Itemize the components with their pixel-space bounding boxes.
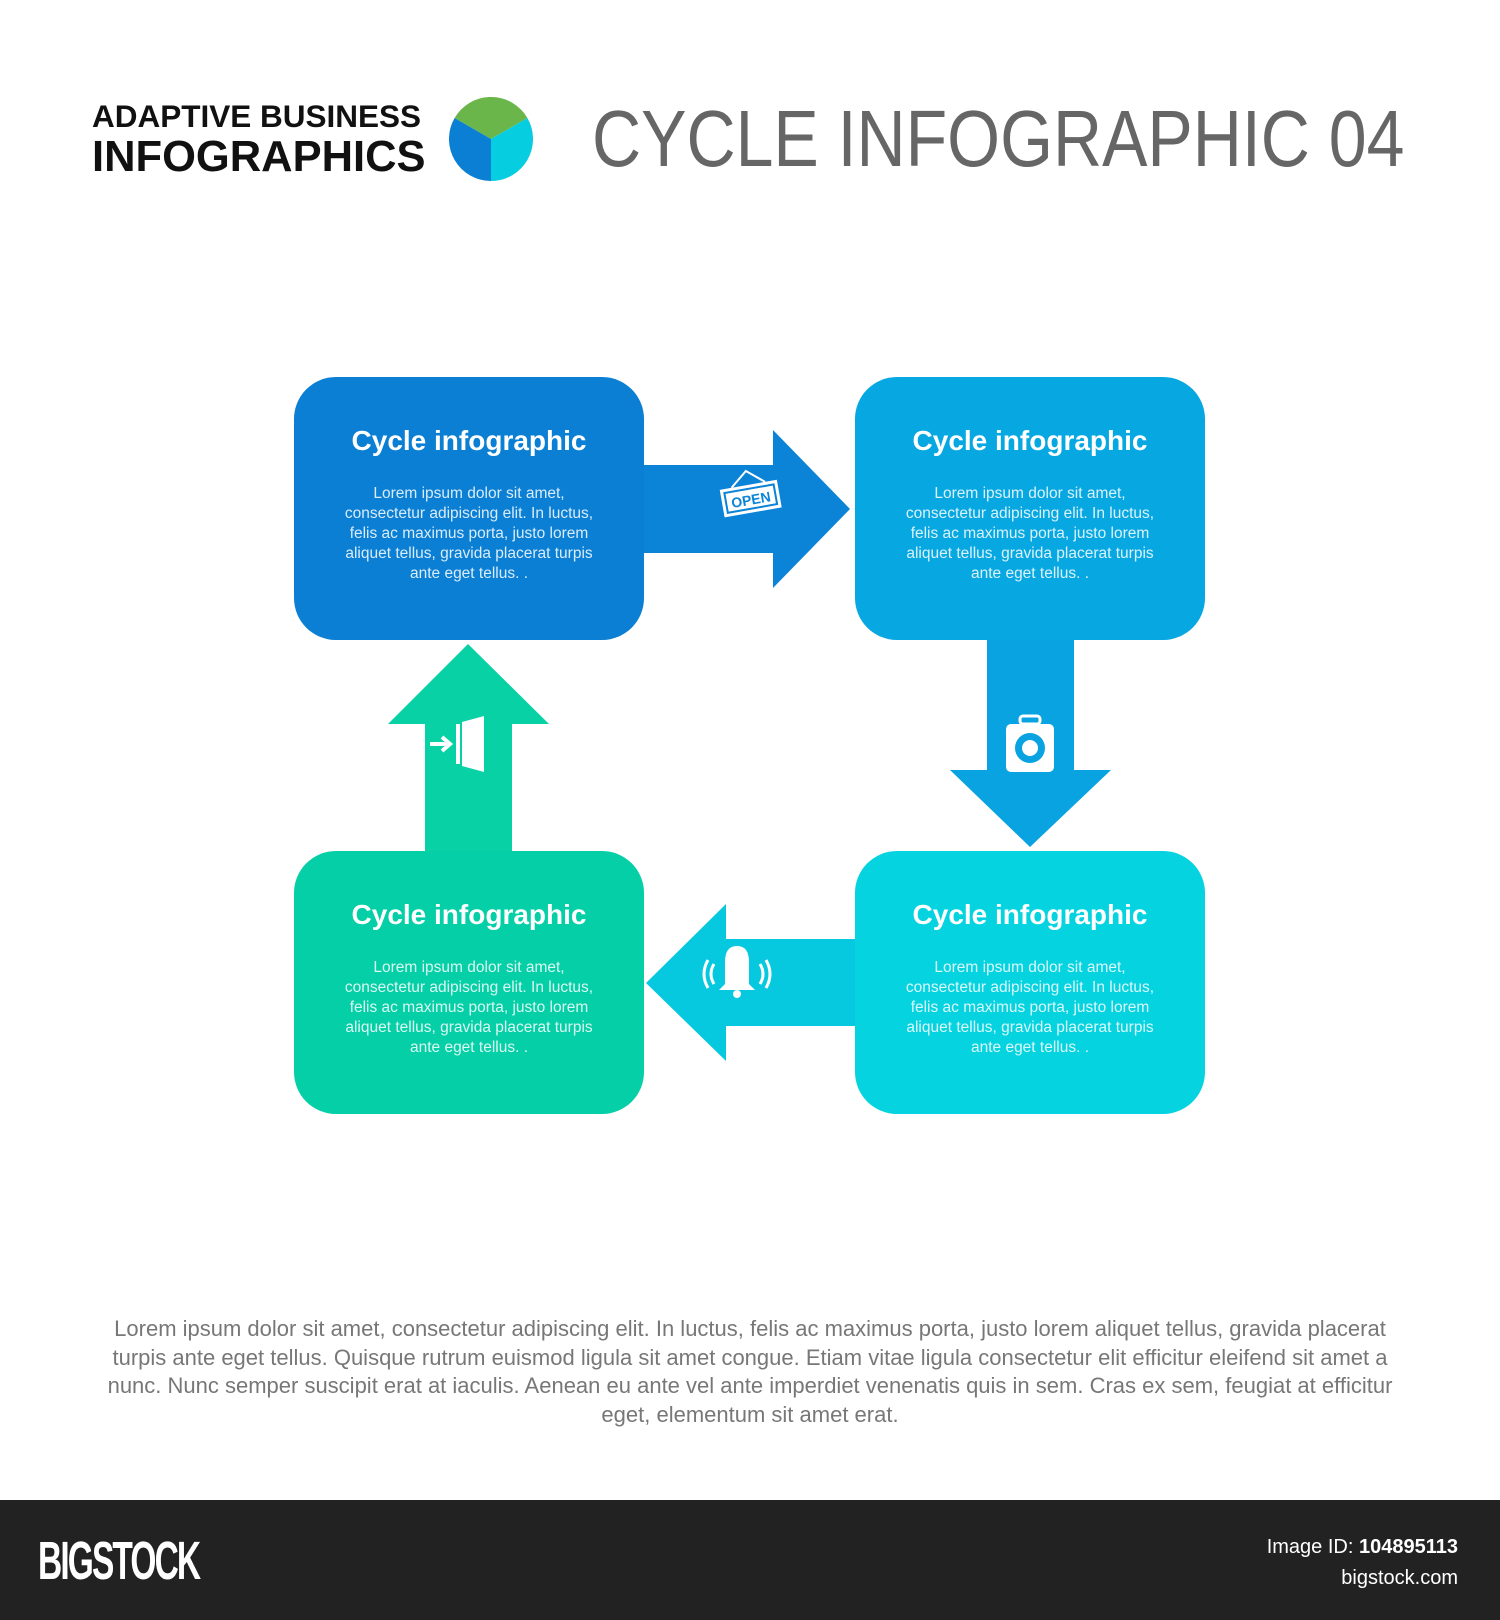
panel: bottom right: Cycle infographic (913, 899, 1147, 930)
bottom paragraph: Lorem ipsum dolor sit amet, consectetur adipiscing elit. In luctus, felis ac maximus porta, justo lorem aliquet tellus, gravida placerat turpis ante eget tellus. Quisque rutrum euismod ligula sit amet congue. Etiam vitae ligula consectetur elit efficitur eleifend sit amet a nunc. Nunc semper suscipit erat at iaculis. Aenean eu ante vel ante imperdiet venenatis quis in sem. Cras ex sem, feugiat at efficitur eget, elementum sit amet erat. (108, 1316, 1392, 1426)
panel: top right: Lorem ipsum dolor sit amet, consectetur adipiscing elit. In luctus, felis ac maximus porta, justo lorem aliquet tellus, gravida placerat turpis ante eget tellus. . (906, 485, 1154, 582)
header logo text: INFOGRAPHICS (92, 133, 426, 181)
panel: top left: Lorem ipsum dolor sit amet, consectetur adipiscing elit. In luctus, felis ac maximus porta, justo lorem aliquet tellus, gravida placerat turpis ante eget tellus. . (345, 485, 593, 582)
arrow: down (950, 640, 1111, 847)
panel: top left: Cycle infographic (352, 425, 586, 456)
title: CYCLE INFOGRAPHIC 04 (592, 94, 1404, 183)
panel: bottom right (855, 851, 1205, 1114)
footer bar (0, 1500, 1500, 1620)
panel: bottom right: Lorem ipsum dolor sit amet, consectetur adipiscing elit. In luctus, felis ac maximus porta, justo lorem aliquet tellus, gravida placerat turpis ante eget tellus. . (906, 959, 1154, 1056)
panel: bottom left: Cycle infographic (352, 899, 586, 930)
arrow: right (644, 430, 850, 588)
panel: top right: Cycle infographic (913, 425, 1147, 456)
panel: top left (294, 377, 644, 640)
footer bar: bigstock.com (1341, 1567, 1458, 1589)
footer bar: BIGSTOCK (38, 1531, 199, 1591)
panel: bottom left (294, 851, 644, 1114)
arrow: right: OPEN (730, 488, 772, 511)
header logo text: ADAPTIVE BUSINESS (92, 98, 421, 134)
icon: pie logo (449, 97, 533, 181)
header logo text (92, 98, 426, 181)
arrow: up (388, 644, 549, 851)
arrow: left (646, 904, 855, 1061)
panel: top right (855, 377, 1205, 640)
footer bar: Image ID: 104895113 (1267, 1536, 1458, 1558)
panel: bottom left: Lorem ipsum dolor sit amet, consectetur adipiscing elit. In luctus, felis ac maximus porta, justo lorem aliquet tellus, gravida placerat turpis ante eget tellus. . (345, 959, 593, 1056)
